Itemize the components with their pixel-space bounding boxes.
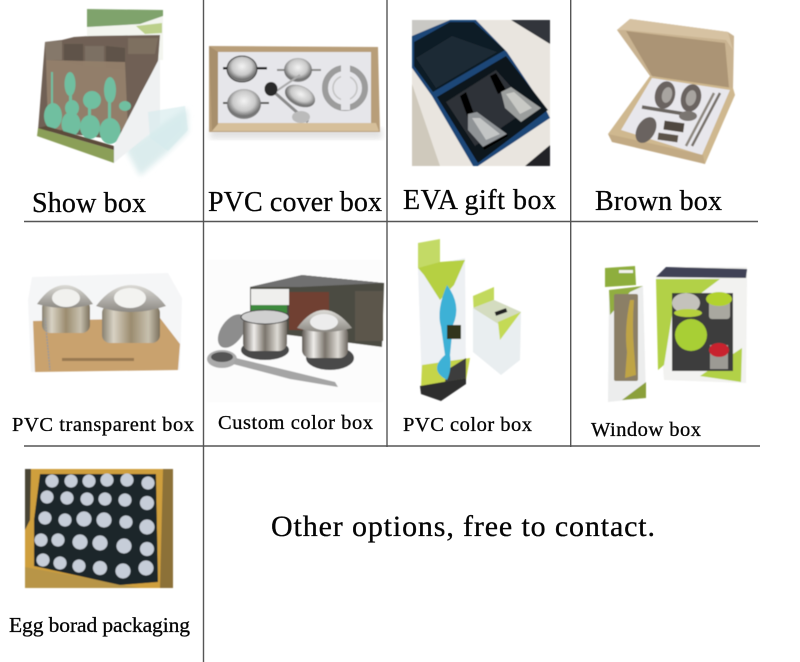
photo: custom color box [207, 260, 384, 402]
label: custom color box: Custom color box [218, 412, 373, 434]
label: show box: Show box [32, 188, 146, 219]
photo: egg board packaging [25, 469, 173, 588]
photo: EVA gift box [412, 20, 550, 166]
photo: window box [605, 266, 747, 402]
label: PVC transparent box: PVC transparent box [12, 414, 194, 436]
photo: PVC color box [418, 239, 521, 401]
label: PVC color box: PVC color box [403, 414, 532, 436]
photo: PVC cover box [209, 46, 382, 139]
label: window box: Window box [591, 419, 701, 441]
label: PVC cover box: PVC cover box [208, 187, 382, 218]
label: egg board packaging: Egg borad packaging [9, 613, 190, 637]
label: brown box: Brown box [595, 186, 722, 217]
callout: other options: Other options, free to contact. [271, 510, 655, 543]
photo: brown box [608, 19, 735, 164]
photo: show box [37, 9, 188, 176]
photo: PVC transparent box [28, 273, 182, 372]
label: EVA gift box: EVA gift box [403, 185, 556, 216]
